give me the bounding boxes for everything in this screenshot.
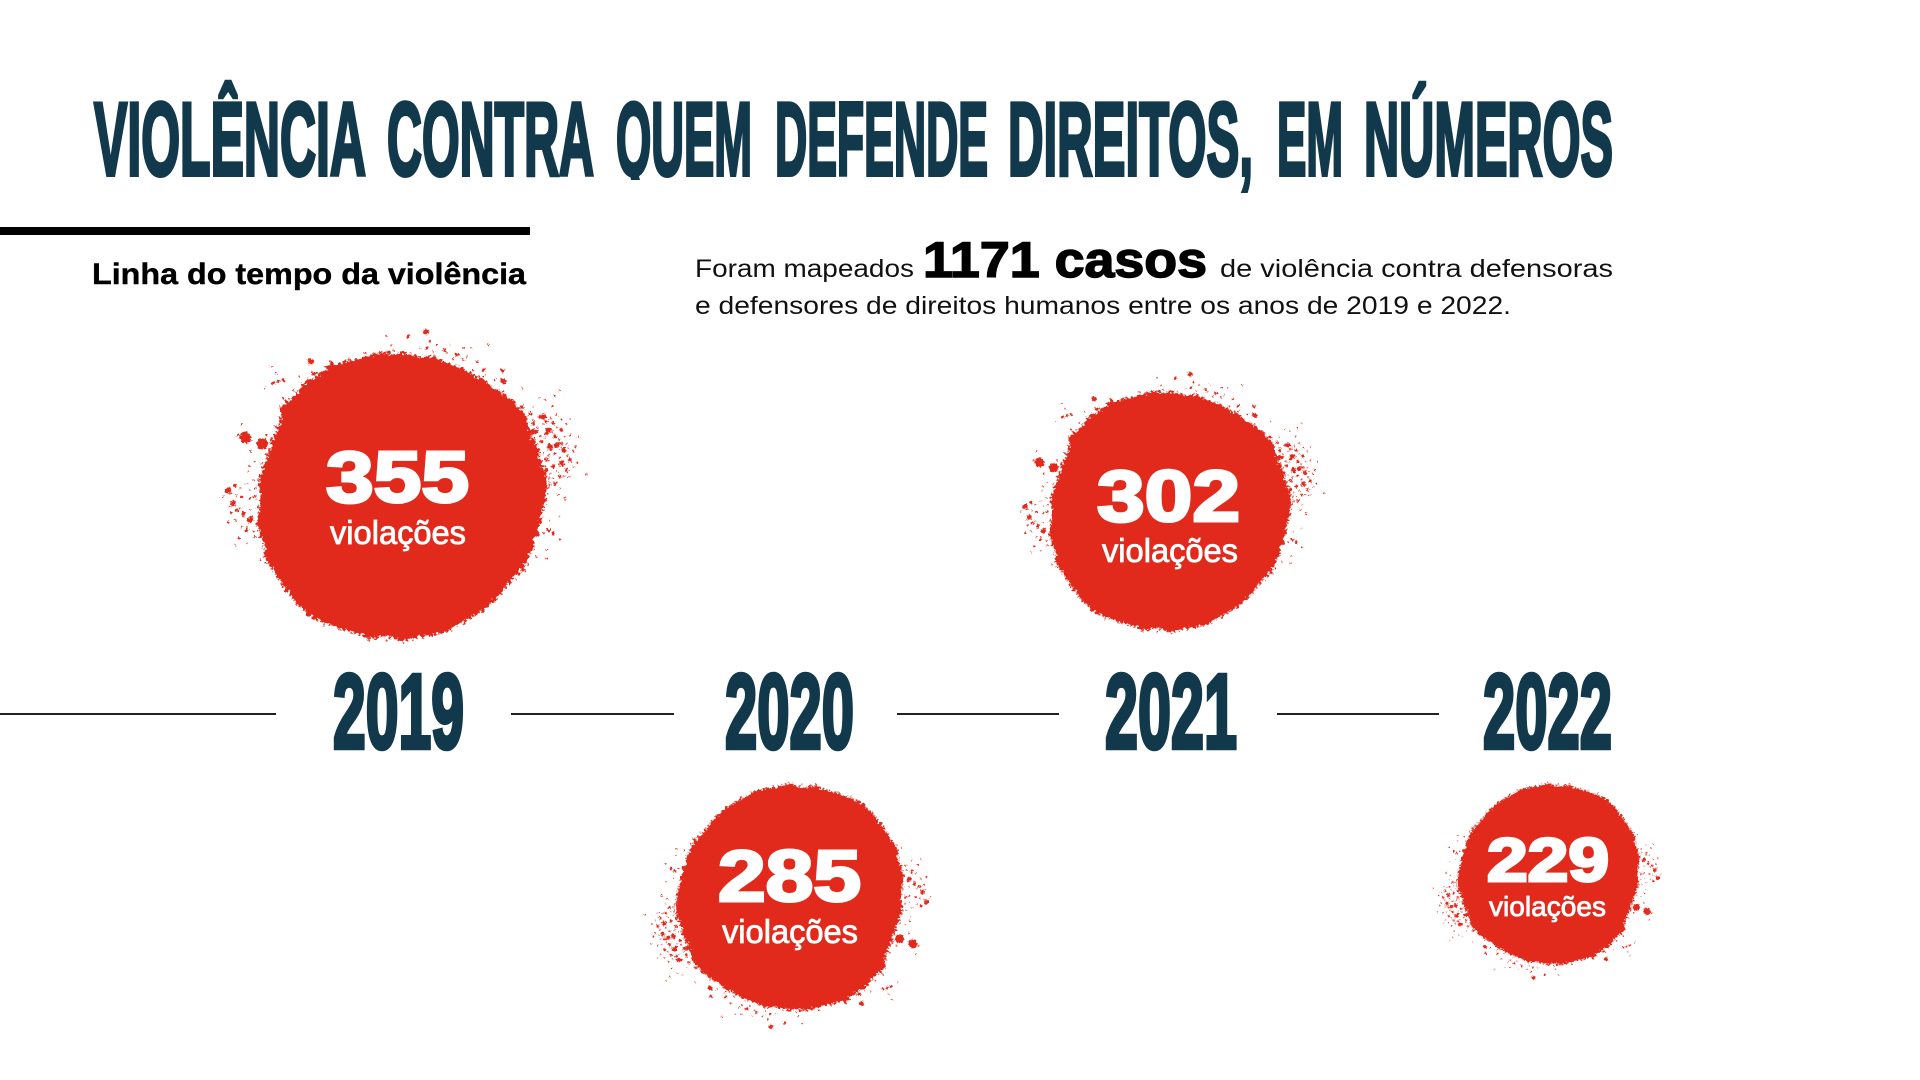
text: NÚMEROS — [1364, 82, 1613, 198]
bubble: 2020, 285 violations — [645, 783, 930, 1027]
intro text: e defensores de direitos humanos entre os anos de 2019 e 2022. — [695, 292, 1511, 320]
year labels: 2022 — [1483, 653, 1612, 771]
title: DEFENDE — [775, 82, 988, 198]
bubble: 2021, 302 violations: 302 — [1097, 457, 1240, 537]
year labels: 2021 — [1105, 653, 1237, 771]
bubble: 2021, 302 violations — [1021, 374, 1324, 633]
bubble: 2019, 355 violations: 355 — [326, 438, 469, 518]
bubble: 2022, 229 violations — [1433, 783, 1661, 978]
year labels: 2020 — [725, 653, 854, 771]
title: VIOLÊNCIA — [94, 82, 366, 198]
year labels: 2019 — [333, 653, 464, 771]
bubble: 2020, 285 violations: violações — [722, 913, 858, 950]
bubble: 2022, 229 violations: 229 — [1487, 826, 1609, 894]
intro text: de violência contra defensoras — [1220, 255, 1613, 283]
highlighted total: 1171 casos — [923, 232, 1207, 288]
title: DIREITOS, — [1008, 82, 1253, 198]
section heading: timeline: Linha do tempo da violência — [92, 258, 526, 291]
title: EM — [1277, 82, 1343, 198]
bubble: 2019, 355 violations — [223, 332, 586, 643]
intro text — [695, 232, 1613, 320]
bubble: 2019, 355 violations: violações — [330, 514, 466, 551]
bubble: 2022, 229 violations: violações — [1489, 891, 1606, 922]
section rule — [0, 227, 530, 235]
title: CONTRA — [387, 82, 594, 198]
timeline line segments — [0, 713, 1439, 715]
year labels — [333, 653, 1612, 771]
title: QUEM — [616, 82, 752, 198]
intro text: Foram mapeados — [695, 255, 914, 283]
title — [94, 82, 1613, 198]
bubble: 2020, 285 violations: 285 — [718, 837, 861, 917]
bubble: 2021, 302 violations: violações — [1102, 532, 1238, 569]
